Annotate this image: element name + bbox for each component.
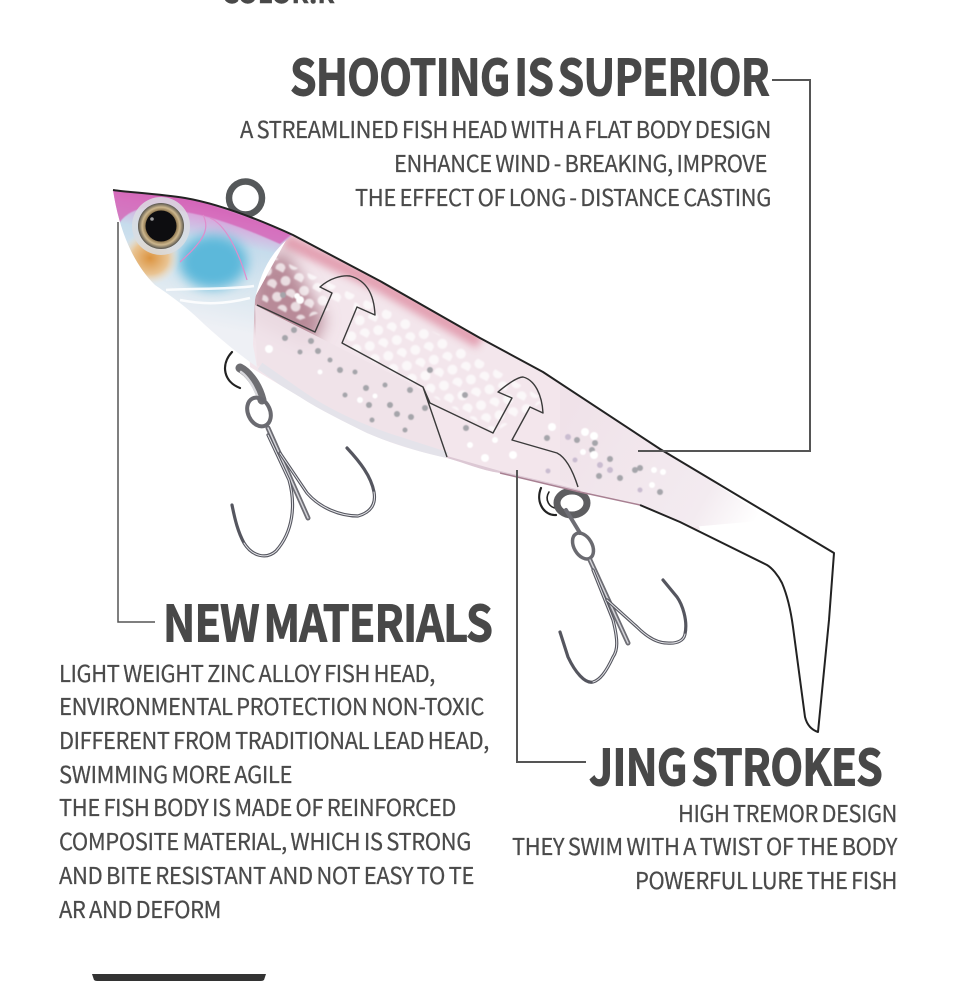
front treble hook — [225, 352, 374, 556]
soft body — [250, 236, 740, 530]
text block: new materials description — [59, 655, 489, 925]
text block: new materials description: ENVIRONMENTAL PROTECTION NON-TOXIC — [59, 688, 484, 722]
text block: new materials description: AND BITE RESISTANT AND NOT EASY TO TE — [59, 857, 474, 891]
inner structure lines with arrows — [257, 276, 578, 487]
text block: jing strokes description: THEY SWIM WITH A TWIST OF THE BODY — [512, 828, 898, 862]
text block: new materials description: DIFFERENT FROM TRADITIONAL LEAD HEAD, — [59, 722, 489, 756]
heading: new materials: NEW MATERIALS — [163, 584, 492, 656]
metal head — [113, 191, 292, 366]
leader line: jing strokes — [517, 470, 586, 762]
text block: shooting description — [240, 111, 771, 213]
text block: jing strokes description: HIGH TREMOR DESIGN — [678, 795, 897, 829]
leader line: shooting — [638, 80, 810, 451]
text block: new materials description: LIGHT WEIGHT ZINC ALLOY FISH HEAD, — [59, 655, 435, 689]
bottom bar — [92, 974, 266, 981]
text block: new materials description: SWIMMING MORE AGILE — [59, 756, 292, 790]
heading: jing strokes: JING STROKES — [589, 728, 882, 800]
outlines — [113, 190, 834, 732]
text block: new materials description: THE FISH BODY IS MADE OF REINFORCED — [59, 789, 456, 823]
text block: new materials description: AR AND DEFORM — [59, 891, 221, 925]
text block: shooting description: ENHANCE WIND - BREAKING, IMPROVE — [394, 145, 767, 179]
text block: shooting description: A STREAMLINED FISH HEAD WITH A FLAT BODY DESIGN — [240, 111, 771, 145]
heading: shooting is superior: SHOOTING IS SUPERIOR — [290, 38, 769, 110]
lure eye — [132, 197, 190, 255]
text block: shooting description: THE EFFECT OF LONG - DISTANCE CASTING — [355, 179, 771, 213]
rear treble hook — [539, 488, 686, 682]
leader line: new materials — [118, 222, 155, 622]
text block: jing strokes description — [512, 795, 898, 896]
text block: jing strokes description: POWERFUL LURE THE FISH — [635, 862, 897, 896]
icon: fishing lure — [105, 182, 850, 740]
text block: new materials description: COMPOSITE MATERIAL, WHICH IS STRONG — [59, 823, 471, 857]
silver glitter — [265, 292, 666, 495]
top eyelet — [229, 182, 262, 214]
